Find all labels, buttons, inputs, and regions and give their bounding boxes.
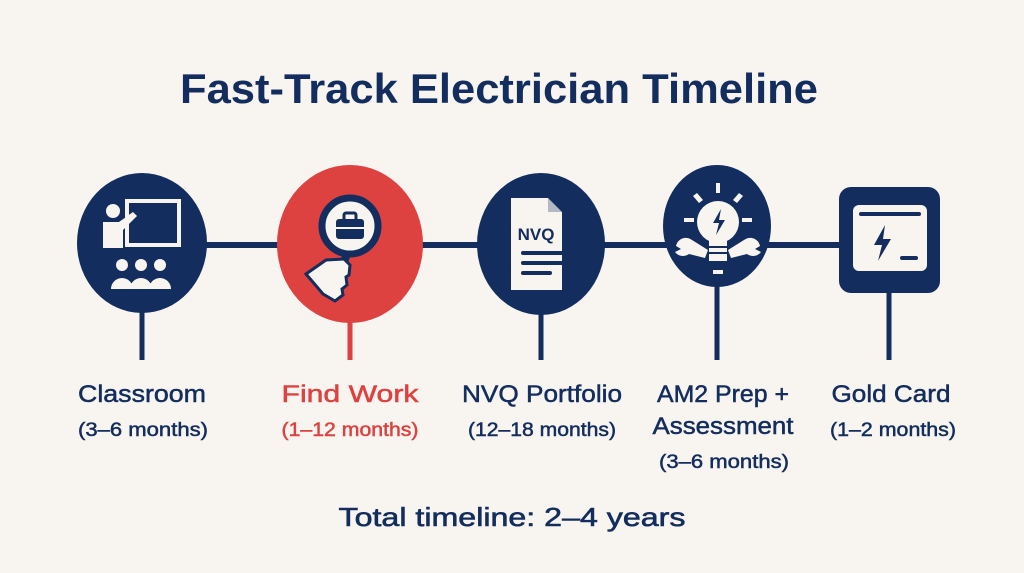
step: NVQ portfolio: NVQ bbox=[518, 225, 554, 244]
timeline line bbox=[140, 242, 890, 248]
step: NVQ portfolio bbox=[477, 173, 605, 360]
label: classroom: (3–6 months) bbox=[78, 420, 208, 441]
label: NVQ: (12–18 months) bbox=[468, 420, 616, 441]
icon: teacher bbox=[103, 201, 179, 289]
label: classroom bbox=[78, 381, 208, 441]
total timeline: Total timeline: 2–4 years bbox=[338, 502, 686, 532]
icon: magnifier with briefcase bbox=[322, 198, 378, 254]
label: AM2 bbox=[652, 381, 794, 473]
label: NVQ bbox=[462, 381, 622, 441]
label: find work: (1–12 months) bbox=[282, 420, 418, 441]
label: classroom: Classroom bbox=[78, 381, 206, 408]
step: classroom bbox=[77, 173, 207, 360]
step: find work bbox=[277, 165, 423, 360]
label: AM2: AM2 Prep + bbox=[657, 381, 789, 408]
label: gold card: (1–2 months) bbox=[830, 420, 956, 441]
icon: document bbox=[511, 198, 562, 290]
label: find work bbox=[282, 381, 420, 441]
label: gold card bbox=[830, 381, 956, 441]
title: Fast-Track Electrician Timeline bbox=[180, 65, 818, 112]
step: gold card bbox=[839, 187, 940, 360]
label: AM2: Assessment bbox=[652, 413, 794, 440]
label: AM2: (3–6 months) bbox=[659, 452, 789, 473]
label: find work: Find Work bbox=[282, 381, 420, 408]
label: NVQ: NVQ Portfolio bbox=[462, 381, 622, 408]
step: AM2 bbox=[663, 165, 771, 360]
label: gold card: Gold Card bbox=[832, 381, 950, 408]
icon: bulb with wrenches bbox=[675, 183, 761, 274]
icon: card with bolt bbox=[853, 205, 927, 271]
